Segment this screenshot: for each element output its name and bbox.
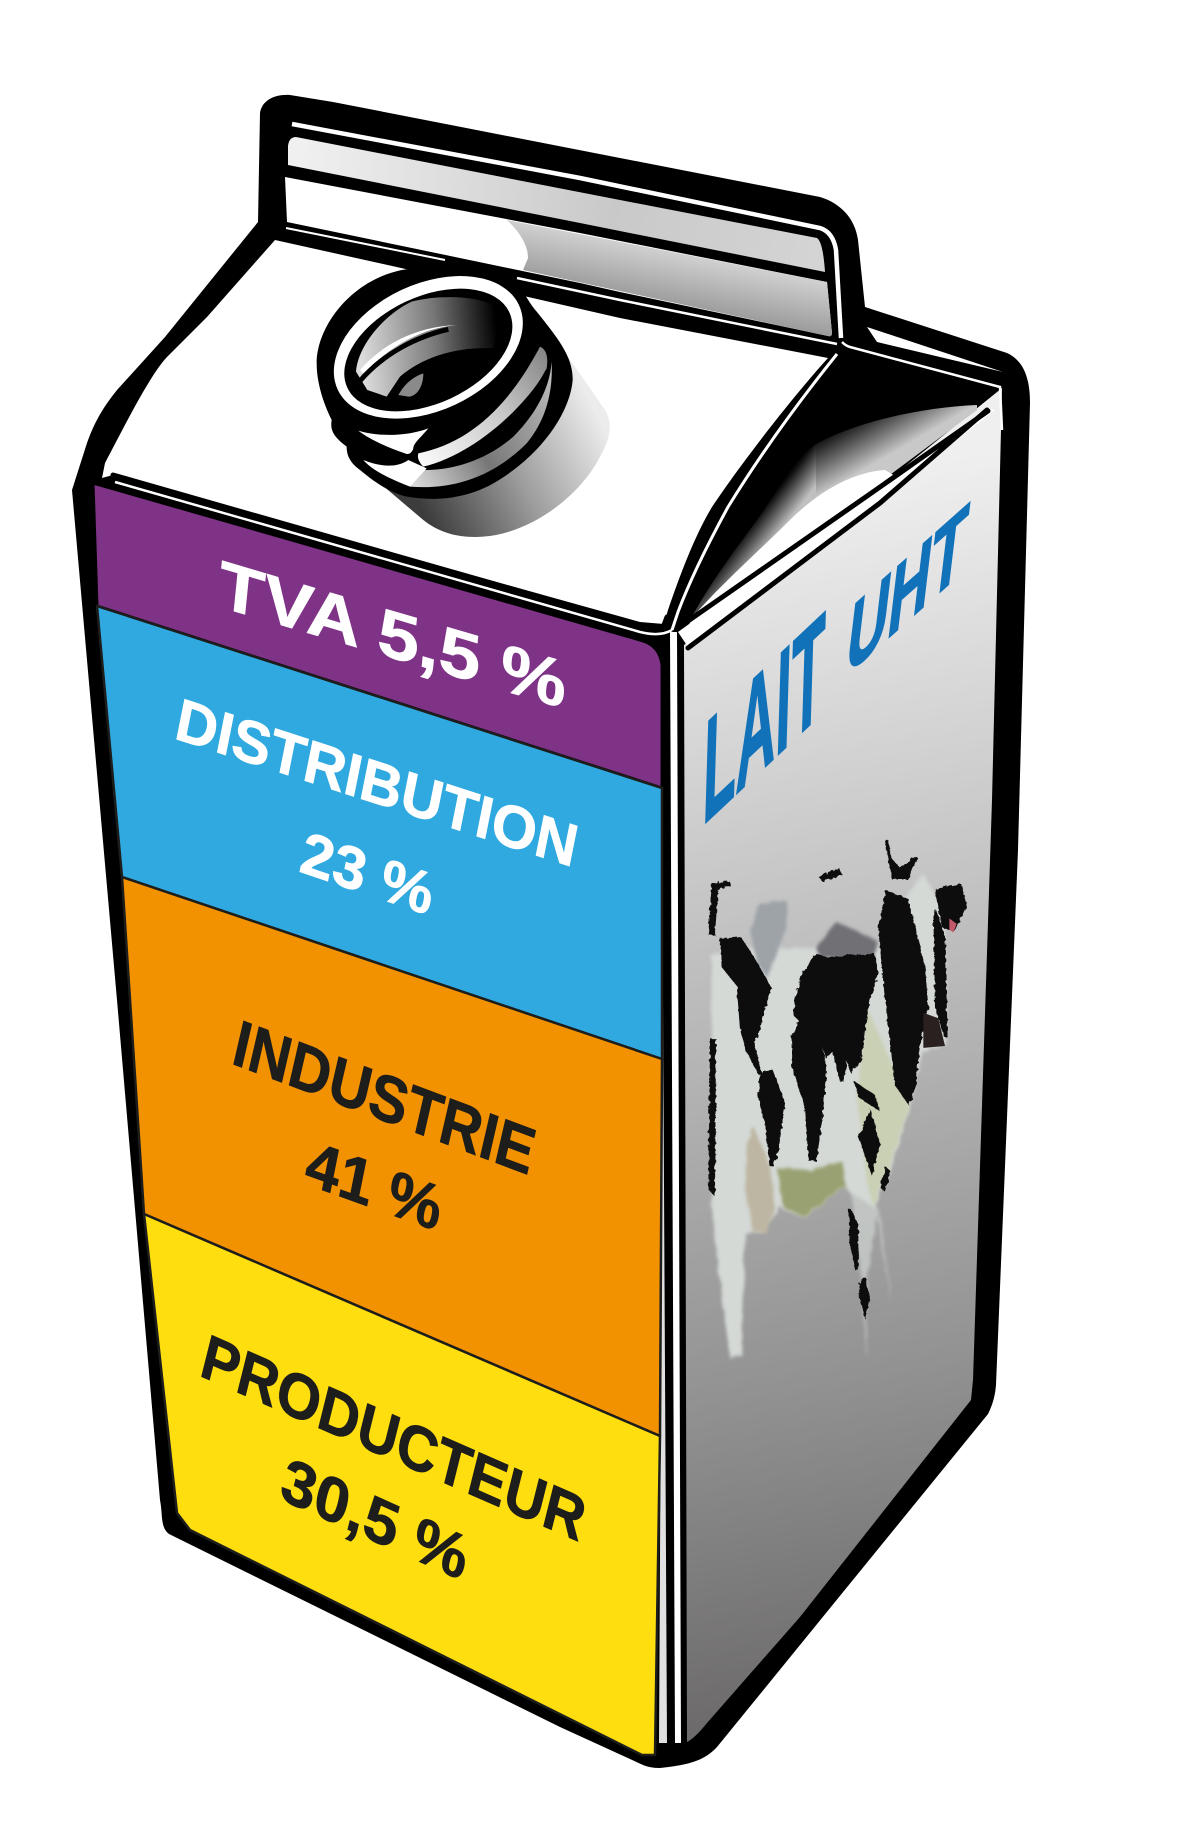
cap inner oval [398,373,423,397]
label TVA: TVA 5,5 % [216,547,570,723]
front colour bands [93,483,662,1755]
spot australia [860,1114,878,1170]
cap inner stroke [359,329,448,382]
label distribution percent: 23 % [295,818,440,928]
label distribution: DISTRIBUTION [170,686,583,880]
cap lower thread [397,362,552,487]
cow horn [887,841,917,878]
cow tail top [710,883,730,933]
fold crescent right [816,405,977,530]
band industrie [122,877,662,1436]
label industrie percent: 41 % [300,1127,448,1245]
tab shaded flap [507,220,832,336]
cow front legs [850,1185,892,1359]
label producteur percent: 30,5 % [275,1443,476,1594]
cap upper wedge [358,428,428,454]
cow chest [857,1007,910,1207]
cap inner shading [356,297,498,397]
strip white line [670,632,681,1743]
label industrie: INDUSTRIE [227,1006,542,1188]
cow grey patch [750,900,787,978]
carton outline silhouette [72,95,1030,1768]
icon: cow with world map spots [710,841,965,1359]
strip lower wedge [659,1000,667,1743]
cap middle thread [418,347,547,467]
cow leg spot [850,1211,857,1270]
spot neck [880,892,927,1102]
tab upper grey stripe [288,137,825,272]
spot north america [722,939,770,1074]
crease white line [672,354,837,630]
corner strip [659,632,681,1743]
upper diagonal line [678,411,988,628]
cap lower highlight [363,460,427,487]
band TVA [93,483,662,788]
right side grey face [684,388,1002,1742]
right gable fold [672,327,1003,650]
cow back mark [822,870,840,880]
title word UHT: UHT [841,480,973,699]
lower diagonal line [688,410,987,648]
tab white strip [292,124,841,338]
icon: screw cap [311,248,610,537]
cow nose [949,918,957,932]
cap thread stroke [430,371,547,467]
cow thigh spot [882,1170,889,1188]
product title: LAIT [701,580,827,858]
spot eurasia [795,955,877,1081]
cap inner highlight [360,325,457,373]
cow tail [710,1040,714,1192]
spot asia islands [857,1085,877,1107]
tab lower flap [285,177,832,336]
cow grey shoulder [817,922,877,963]
cow udder [745,1126,775,1233]
label producteur: PRODUCTEUR [195,1321,592,1555]
spot africa [793,1022,825,1159]
cow belly [777,1163,845,1218]
cow black map spots [710,841,965,1312]
cow body [712,874,947,1359]
cow ear [937,886,965,929]
cow foot spot [860,1277,868,1312]
shoulder white wedge [867,327,1003,372]
gable and closing tab [102,124,841,634]
cow head band [935,911,946,1037]
gable front black line [113,475,667,629]
spot south america [760,1072,783,1166]
fold crescent left [690,444,816,625]
tab fold slit left [286,228,445,260]
gable white panel [102,240,828,624]
fold white highlight [688,470,897,640]
gable front white gap [115,482,672,634]
cow muzzle [923,1013,945,1048]
band producteur [144,1214,660,1755]
shoulder white line [842,342,1002,430]
product title [701,480,973,858]
band distribution [97,606,662,1059]
tab fold slit right [517,278,837,344]
cap rim [311,248,546,447]
cap black body [317,268,573,499]
cap inside [325,264,532,436]
white gap between diagonals [678,408,995,650]
cap shadow [380,307,610,537]
